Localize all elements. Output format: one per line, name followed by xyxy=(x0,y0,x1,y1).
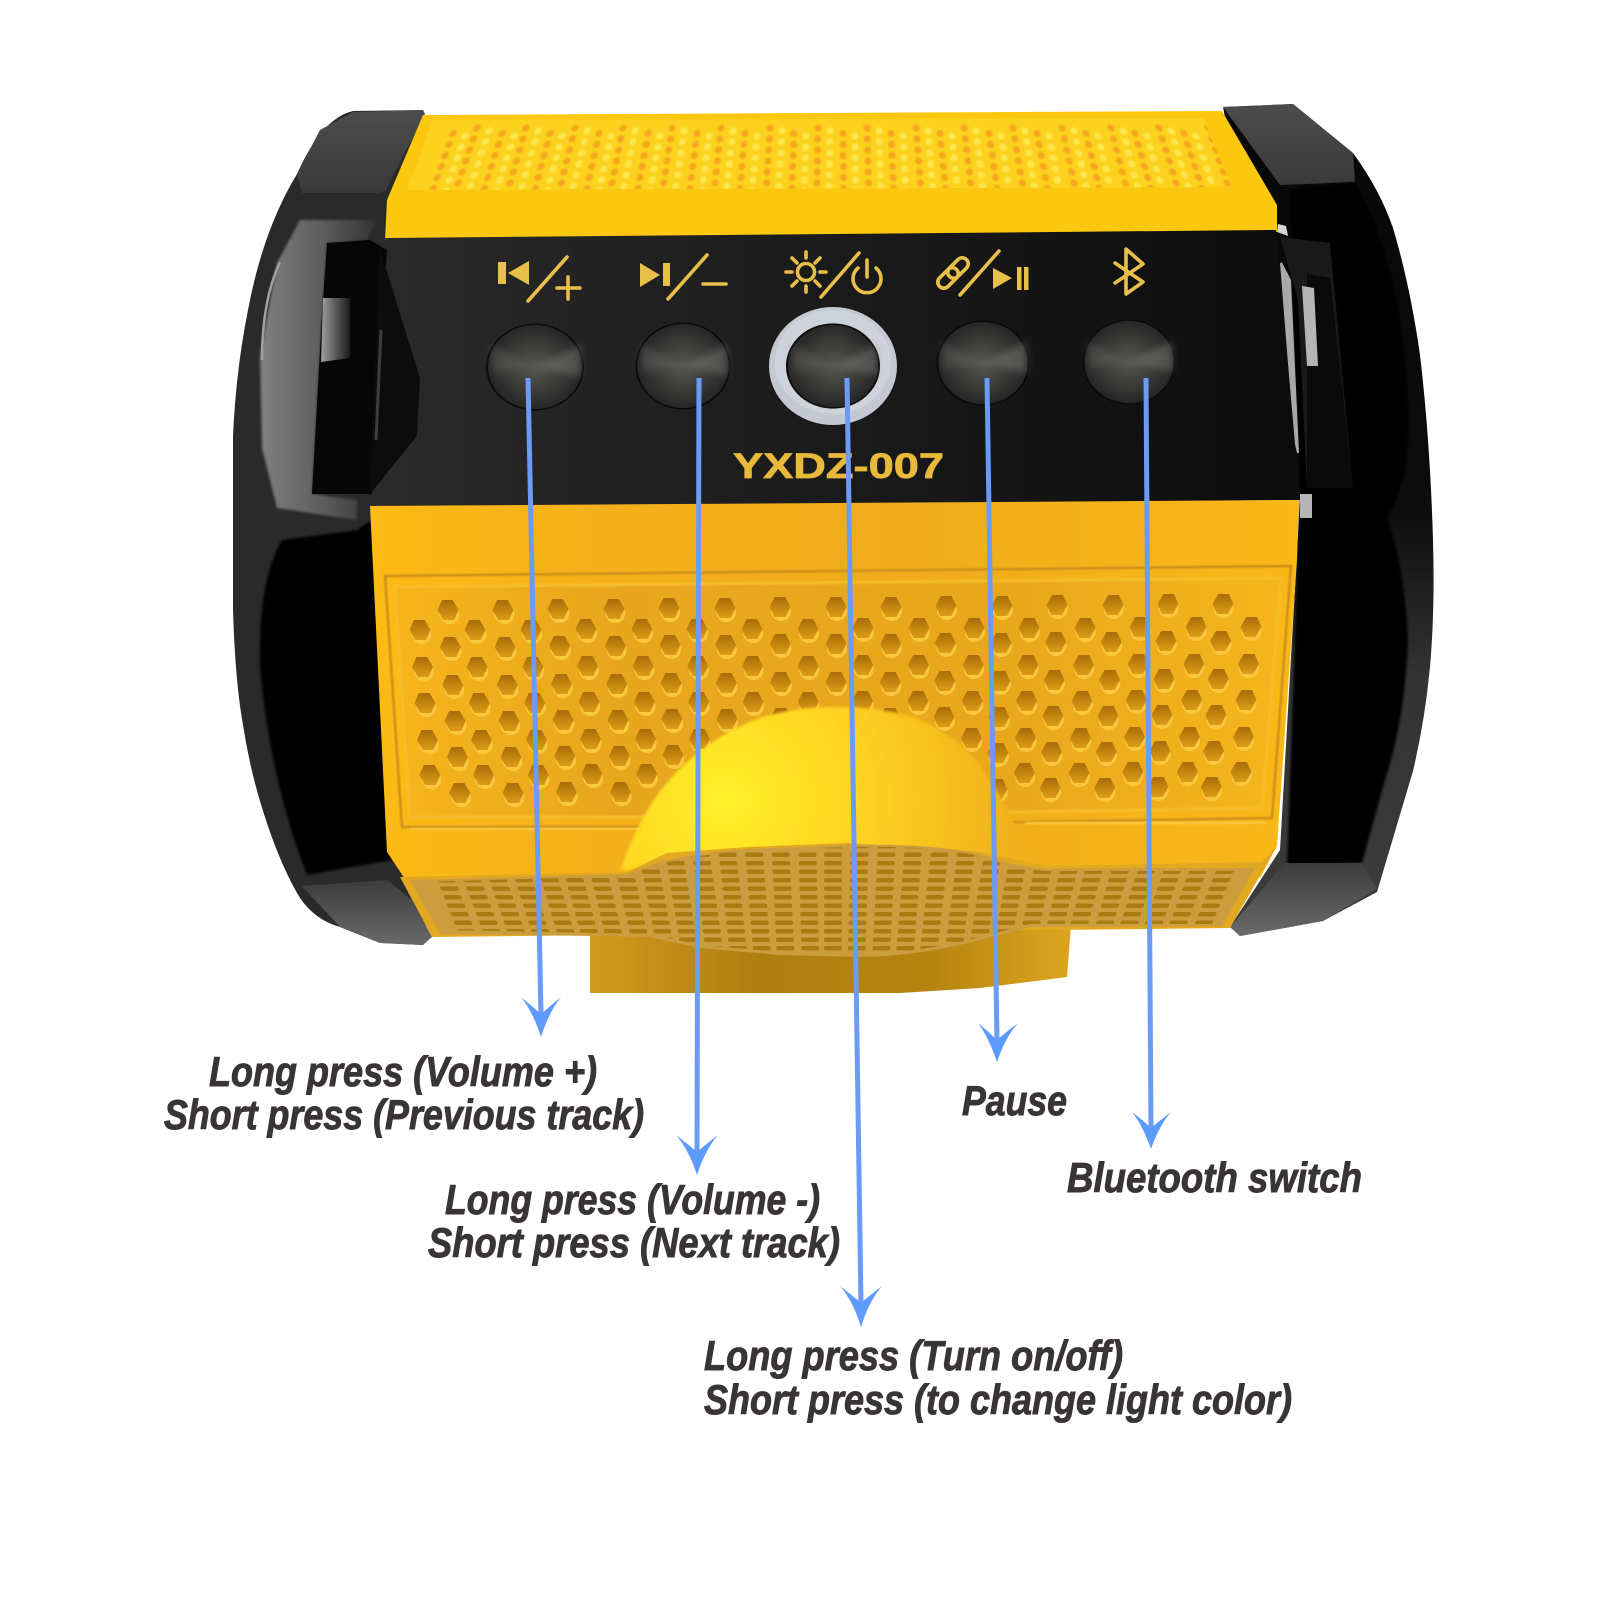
label: button 2 functions xyxy=(428,1176,840,1266)
label: button 3 functions: Short press (to change light color) xyxy=(704,1376,1292,1423)
yellow front face xyxy=(370,500,1299,882)
black control panel xyxy=(370,230,1300,508)
label: button 3 functions xyxy=(704,1332,1292,1423)
icon: bluetooth xyxy=(1115,249,1143,294)
light ring button 3 xyxy=(769,307,897,425)
label: button 2 functions: Short press (Next track) xyxy=(428,1219,840,1266)
front speaker panel with dimples xyxy=(385,566,1291,830)
label: button 1 functions: Short press (Previous track) xyxy=(164,1091,644,1138)
left end cap xyxy=(233,110,470,945)
arrow: button 3 to light label xyxy=(840,378,882,1327)
label: button 1 functions: Long press (Volume +) xyxy=(209,1048,597,1095)
grille slots xyxy=(423,844,1244,950)
control buttons xyxy=(486,307,1176,425)
button 1 xyxy=(486,324,584,410)
top dotted grille xyxy=(428,124,1232,192)
icon: next / volume down xyxy=(640,255,726,299)
button 5 xyxy=(1082,319,1176,405)
base stand xyxy=(590,925,1071,993)
button 2 xyxy=(635,322,731,410)
arrow: button 4 to pause label xyxy=(978,378,1018,1062)
icon: light / power xyxy=(786,252,881,297)
icon: link / play pause xyxy=(935,251,1028,295)
label: bluetooth switch: Bluetooth switch xyxy=(1067,1154,1362,1201)
top yellow face xyxy=(385,111,1277,240)
label: pause: Pause xyxy=(962,1077,1067,1124)
button 4 xyxy=(936,320,1030,406)
right end cap xyxy=(1223,104,1434,936)
arrow: button 1 to volume up label xyxy=(521,378,561,1037)
hexagon dimples xyxy=(409,594,1263,807)
speaker product photo xyxy=(233,104,1434,993)
label: button 3 functions: Long press (Turn on/off) xyxy=(704,1332,1123,1379)
arrow: button 5 to bluetooth label xyxy=(1132,378,1171,1149)
bottom slotted grille xyxy=(400,843,1277,957)
icon: previous / volume up xyxy=(498,257,580,301)
model name: YXDZ-007 xyxy=(733,447,944,486)
label: button 2 functions: Long press (Volume -) xyxy=(445,1176,820,1223)
top dotted grille highlights xyxy=(440,127,1219,195)
label: button 1 functions xyxy=(164,1048,644,1138)
central dome xyxy=(620,707,1032,870)
arrow: button 2 to volume down label xyxy=(676,378,718,1175)
